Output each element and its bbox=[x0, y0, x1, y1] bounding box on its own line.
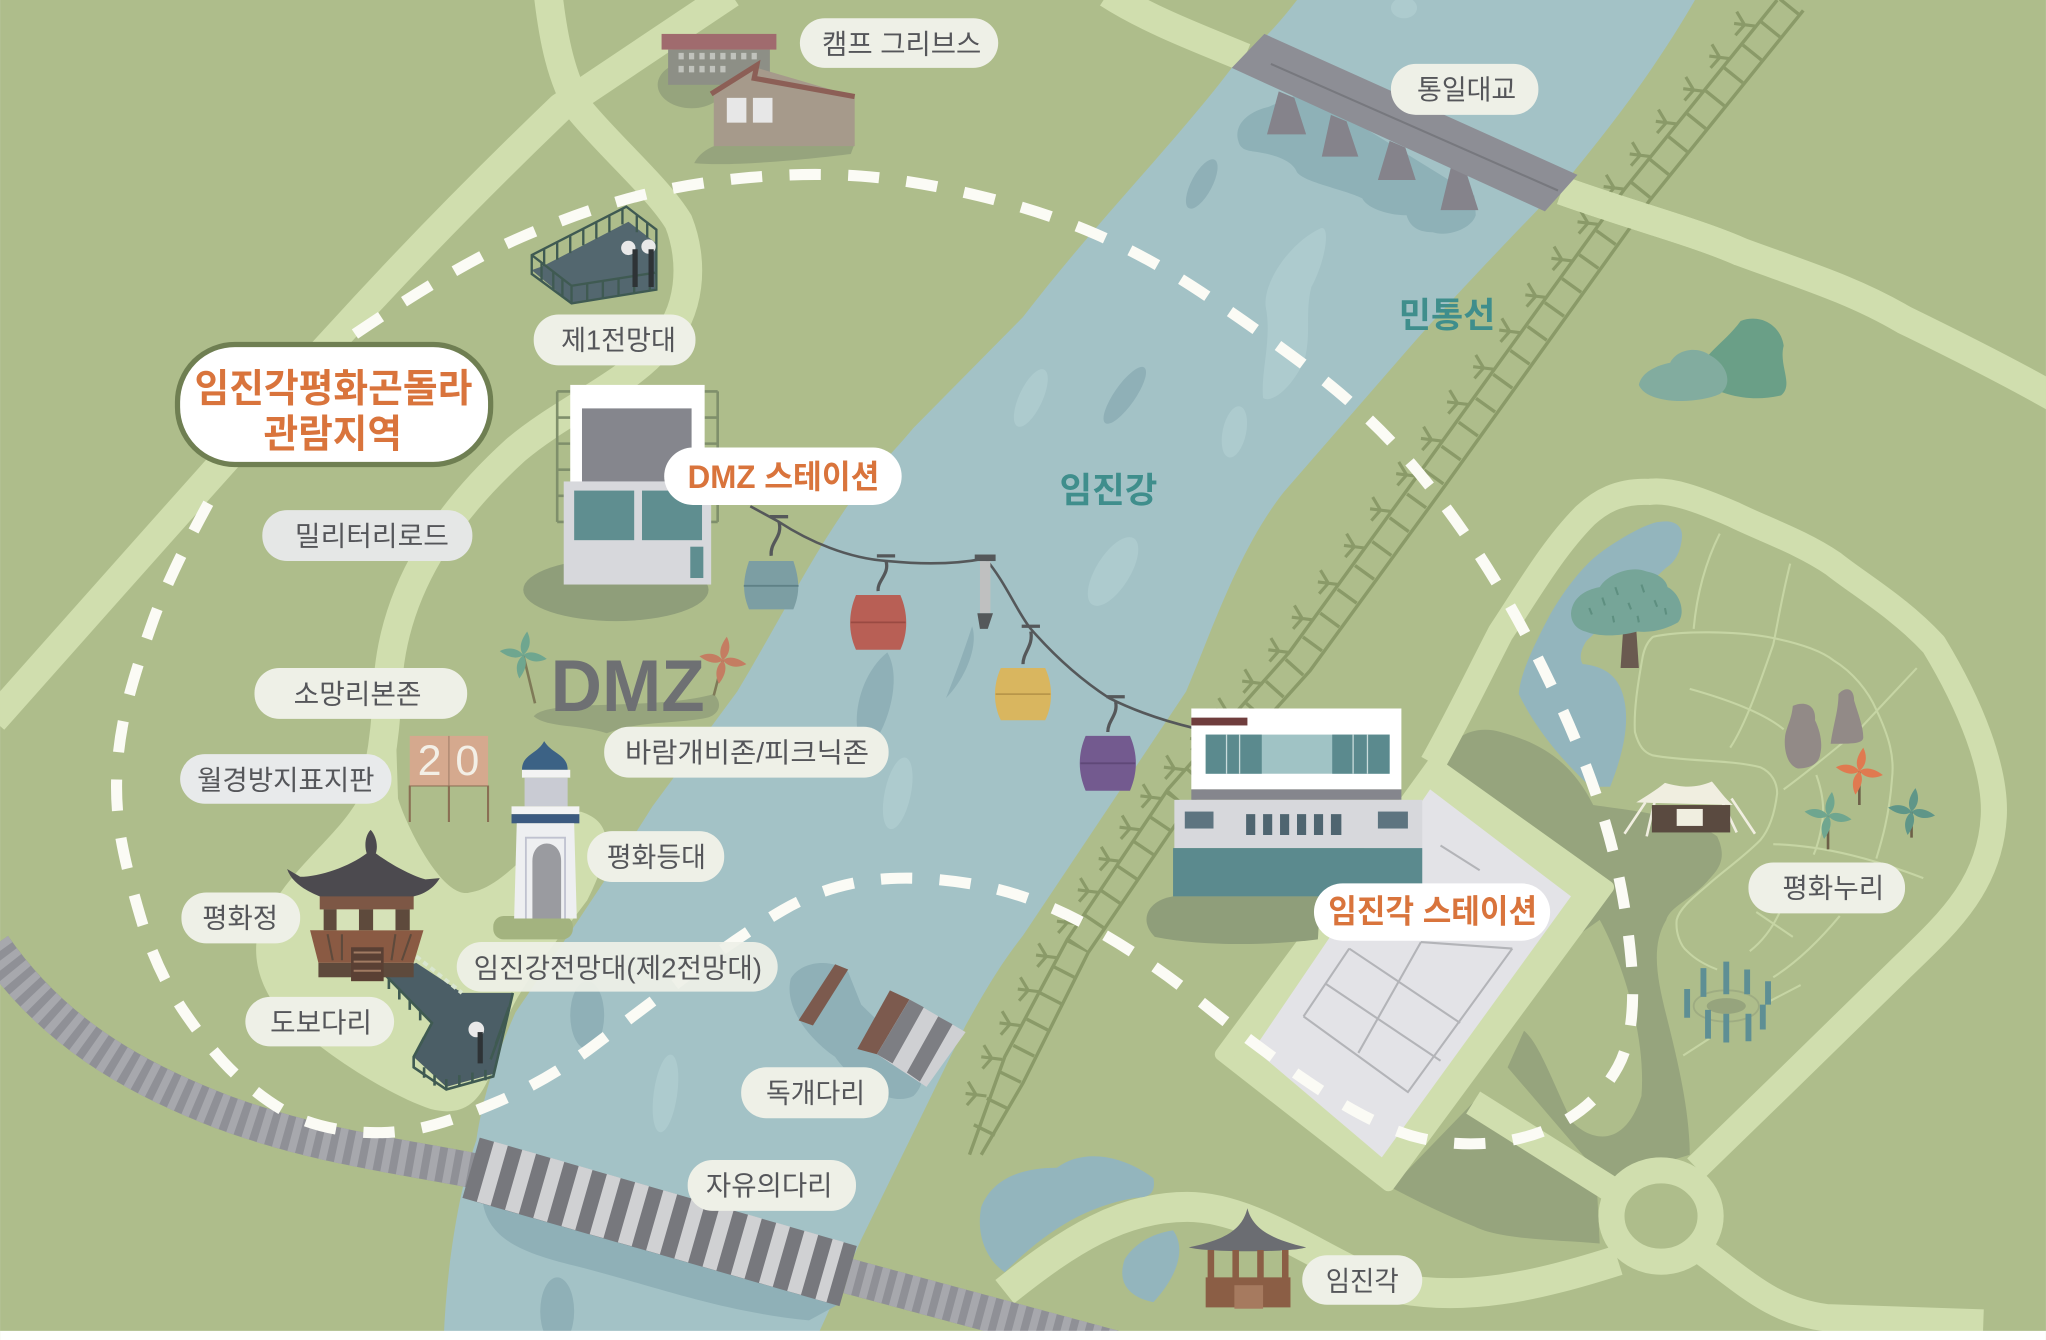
lighthouse bbox=[493, 741, 579, 939]
label: hope ribbon zone bbox=[254, 668, 467, 719]
label: military road bbox=[262, 510, 472, 561]
first observatory bbox=[532, 207, 656, 303]
label: freedom bridge: 자유의다리 bbox=[706, 1170, 833, 1201]
label: DMZ station bbox=[664, 448, 902, 505]
label: imjingak: 임진각 bbox=[1326, 1265, 1399, 1296]
DMZ sign bbox=[500, 632, 746, 733]
DMZ sign: DMZ bbox=[551, 646, 705, 727]
title callout: 관람지역 bbox=[264, 414, 402, 457]
sign 20: 0 bbox=[455, 737, 479, 785]
label: footbridge: 도보다리 bbox=[270, 1007, 372, 1038]
light green area around pavilion bbox=[256, 718, 606, 1111]
label: military road: 밀리터리로드 bbox=[295, 520, 449, 551]
label: imjin river: 임진강 bbox=[1060, 471, 1157, 510]
Tongil bridge bbox=[1232, 34, 1578, 211]
Camp Greaves buildings bbox=[658, 34, 855, 164]
Pyeonghwajeong pavilion bbox=[287, 830, 440, 981]
label: civilian control line: 민통선 bbox=[1399, 296, 1495, 335]
label: imjin river observatory: 임진강전망대(제2전망대) bbox=[474, 952, 762, 983]
Freedom bridge bbox=[471, 1168, 848, 1276]
bottom margin bbox=[0, 1331, 2046, 1340]
label: border sign bbox=[180, 754, 391, 804]
tree bbox=[1571, 569, 1682, 668]
label: border sign: 월경방지표지판 bbox=[197, 764, 375, 795]
label: footbridge bbox=[245, 997, 394, 1046]
stone statues bbox=[1785, 689, 1863, 769]
label: peace pavilion bbox=[181, 892, 300, 943]
river bbox=[444, 0, 1695, 1340]
cable tower bbox=[946, 555, 996, 698]
Imjingak station building bbox=[1146, 708, 1422, 944]
title callout bbox=[178, 344, 491, 464]
label: camp greaves: 캠프 그리브스 bbox=[822, 28, 981, 59]
lighter lawn inside band bbox=[1461, 920, 1642, 1136]
river patches bbox=[483, 0, 1476, 1340]
label: camp greaves bbox=[800, 18, 998, 68]
dashed route bbox=[117, 174, 1633, 1144]
label: first observatory: 제1전망대 bbox=[561, 325, 676, 356]
label: dokgae bridge: 독개다리 bbox=[766, 1078, 865, 1109]
park paths bbox=[1635, 534, 1923, 1056]
railway bbox=[0, 946, 1148, 1340]
label: imjin river observatory bbox=[457, 942, 778, 992]
label: imjingak bbox=[1302, 1255, 1422, 1305]
tent bbox=[1624, 782, 1755, 836]
Imjingak pavilion bbox=[1189, 1208, 1306, 1309]
dark green lawn bbox=[1391, 730, 1722, 1243]
parking lot with surround bbox=[1221, 763, 1608, 1185]
label: peace lighthouse bbox=[587, 831, 724, 882]
label: Imjingak station: 임진각 스테이션 bbox=[1328, 892, 1537, 929]
circular installation bbox=[1687, 962, 1768, 1043]
label: pinwheel and picnic zone: 바람개비존/피크닉존 bbox=[625, 737, 869, 768]
pinwheels bbox=[1805, 748, 1935, 849]
label: Imjingak station bbox=[1314, 883, 1550, 941]
label: hope ribbon zone: 소망리본존 bbox=[294, 678, 422, 709]
label: tongil bridge bbox=[1391, 64, 1538, 115]
bush bbox=[1639, 319, 1786, 401]
road over fence east of Tongil bridge bbox=[1562, 190, 1741, 252]
label: freedom bridge bbox=[688, 1160, 856, 1211]
fence line bbox=[966, 0, 1803, 1155]
Dokgae bridge bbox=[799, 964, 966, 1087]
cable line bbox=[750, 506, 1194, 728]
sign 20: 2 bbox=[418, 737, 442, 785]
label: DMZ station: DMZ 스테이션 bbox=[688, 458, 879, 495]
label: pinwheel and picnic zone bbox=[604, 727, 889, 778]
label: tongil bridge: 통일대교 bbox=[1417, 74, 1516, 105]
title callout: 임진각평화곤돌라 bbox=[194, 368, 472, 411]
label: peace lighthouse: 평화등대 bbox=[607, 841, 706, 872]
label: pyeonghwa nuri: 평화누리 bbox=[1782, 873, 1884, 904]
second observatory bbox=[384, 956, 513, 1089]
label: dokgae bridge bbox=[741, 1067, 889, 1118]
DMZ station building bbox=[523, 385, 718, 621]
label: peace pavilion: 평화정 bbox=[202, 903, 278, 934]
gondolas bbox=[744, 517, 1136, 791]
sign 20 bbox=[410, 736, 488, 822]
ponds bbox=[980, 521, 1682, 1302]
label: pyeonghwa nuri bbox=[1748, 862, 1905, 913]
label: first observatory bbox=[534, 314, 696, 365]
